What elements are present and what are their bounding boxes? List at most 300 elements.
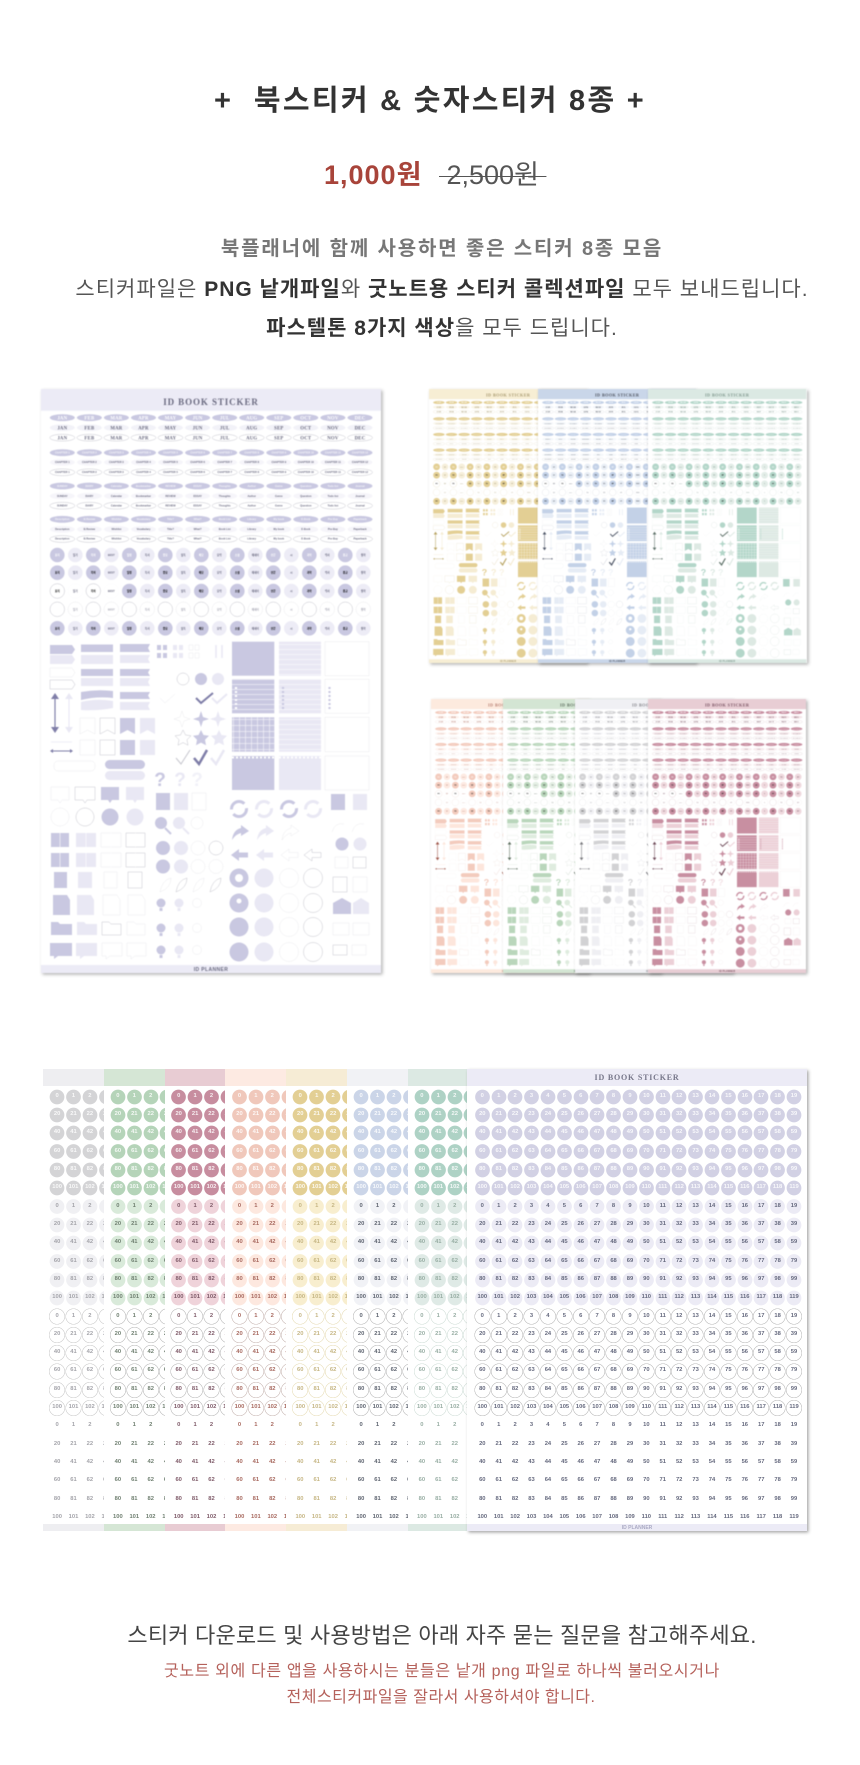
month stickers xyxy=(50,414,373,441)
number strip: green: 41 xyxy=(131,1129,138,1135)
number grids: 24 xyxy=(545,1331,551,1337)
number grids: 4 xyxy=(546,1312,550,1318)
number strip: blue: 61 xyxy=(374,1367,381,1373)
number strip: yellow: 20 xyxy=(297,1331,304,1337)
number grids: 44 xyxy=(545,1239,551,1245)
number strip: grey: 40 xyxy=(54,1459,60,1465)
number strip: blue: 80 xyxy=(358,1166,364,1172)
number grids: 28 xyxy=(610,1111,617,1117)
number strip: blue: 62 xyxy=(391,1148,397,1154)
number grids: 64 xyxy=(545,1477,551,1483)
number strip: yellow: 80 xyxy=(297,1276,304,1282)
number strip: mint: 21 xyxy=(435,1111,442,1117)
number strip: mint: 102 xyxy=(450,1404,460,1410)
number grids: 59 xyxy=(791,1239,797,1245)
number strip: green: 41 xyxy=(131,1349,138,1355)
number grids: 55 xyxy=(725,1129,732,1135)
number grids: 8 xyxy=(612,1422,615,1428)
number strip: mint: 0 xyxy=(420,1422,424,1428)
number strip: green: 20 xyxy=(115,1221,121,1227)
number strip: blue: 60 xyxy=(358,1477,364,1483)
number grids: 21 xyxy=(495,1111,502,1117)
number strip: peach: 40 xyxy=(236,1459,243,1465)
number grids: 100 xyxy=(477,1294,487,1300)
number strip: rose: 0 xyxy=(177,1093,180,1099)
number grids: 70 xyxy=(643,1258,650,1264)
number strip: green: 81 xyxy=(131,1276,138,1282)
number grids: 17 xyxy=(758,1093,764,1099)
number grids: 85 xyxy=(561,1496,568,1502)
month stickers: JUN xyxy=(193,416,203,421)
category stickers: B.Review xyxy=(84,517,96,521)
number strip: green: 81 xyxy=(131,1386,138,1392)
number grids: 54 xyxy=(709,1349,715,1355)
number grids: 33 xyxy=(692,1221,699,1227)
number grids: 23 xyxy=(528,1441,535,1447)
number strip: mint: 80 xyxy=(419,1276,425,1282)
number grids: 12 xyxy=(676,1422,682,1428)
number grids: 46 xyxy=(578,1129,584,1135)
number grids: 8 xyxy=(612,1312,615,1318)
number grids: 103 xyxy=(527,1514,536,1520)
number grids: 49 xyxy=(627,1239,633,1245)
number grids: 105 xyxy=(559,1184,569,1190)
chapter stickers: CHAPTER 3 xyxy=(109,451,124,455)
number grids: 31 xyxy=(660,1221,666,1227)
number strip: mint: 22 xyxy=(451,1221,458,1227)
number strip: green: 80 xyxy=(115,1166,121,1172)
number strip: grey: 2 xyxy=(88,1422,92,1428)
number grids: 92 xyxy=(676,1496,682,1502)
number strip: yellow: 2 xyxy=(331,1422,335,1428)
number strip: blue: 42 xyxy=(391,1239,397,1245)
number grids: 43 xyxy=(528,1239,535,1245)
number grids: 49 xyxy=(627,1459,633,1465)
number grids: 83 xyxy=(528,1496,535,1502)
number strip: mint: 40 xyxy=(419,1459,425,1465)
number grids: 85 xyxy=(561,1166,568,1172)
number strip: mint: 42 xyxy=(451,1459,458,1465)
number strip: rose: 1 xyxy=(193,1093,197,1099)
number strip: rose: 41 xyxy=(192,1239,198,1245)
number strip: yellow: 42 xyxy=(330,1459,336,1465)
number strip: peach: 82 xyxy=(269,1496,276,1502)
number strip: mint: 22 xyxy=(451,1111,458,1117)
number grids: 74 xyxy=(709,1148,715,1154)
number grids: 36 xyxy=(742,1441,748,1447)
number strip: blue: 20 xyxy=(358,1221,364,1227)
chapter stickers: CHAPTER 9 xyxy=(271,451,287,455)
number grids: 37 xyxy=(758,1111,764,1117)
number strip: peach: 40 xyxy=(236,1349,243,1355)
number grids: 91 xyxy=(660,1386,666,1392)
number grids: 30 xyxy=(643,1331,650,1337)
number strip: mint: 80 xyxy=(419,1166,425,1172)
sheet contents: ID BOOK STICKER xyxy=(163,397,259,407)
number grids: 51 xyxy=(660,1349,666,1355)
number strip: green: 0 xyxy=(116,1422,120,1428)
number strip: grey: 81 xyxy=(70,1496,77,1502)
number grids: 95 xyxy=(725,1386,732,1392)
chapter stickers: CHAPTER 2 xyxy=(82,451,97,455)
number strip: rose: 60 xyxy=(175,1367,182,1373)
number strip: blue: 42 xyxy=(391,1129,397,1135)
number grids: 26 xyxy=(578,1111,584,1117)
number strip: grey: 101 xyxy=(69,1514,78,1520)
number strip: blue: 102 xyxy=(389,1514,399,1520)
number grids: 68 xyxy=(610,1258,617,1264)
number grids: 98 xyxy=(774,1386,781,1392)
number strip: grey: 80 xyxy=(54,1386,60,1392)
number strip: mint: 41 xyxy=(435,1129,442,1135)
number strip: blue: 0 xyxy=(359,1093,363,1099)
chapter stickers: CHAPTER 5 xyxy=(163,451,178,455)
number strip: grey: 1 xyxy=(72,1093,75,1099)
number strip: mint: 62 xyxy=(451,1367,458,1373)
number strip: mint: 62 xyxy=(451,1148,458,1154)
number grids: 95 xyxy=(725,1496,732,1502)
number grids: 14 xyxy=(709,1422,715,1428)
number grids: 42 xyxy=(512,1349,518,1355)
number strip: green: 61 xyxy=(131,1148,138,1154)
number strip: rose: 41 xyxy=(192,1129,198,1135)
number grids: 74 xyxy=(709,1477,715,1483)
number strip: yellow: 22 xyxy=(330,1111,336,1117)
panel: grey sheet xyxy=(575,699,733,973)
number strip: peach: 101 xyxy=(251,1404,261,1410)
round label stickers: 독서 xyxy=(145,553,150,557)
number grids: 6 xyxy=(579,1422,582,1428)
number grids: 41 xyxy=(495,1129,502,1135)
number grids: 52 xyxy=(676,1239,682,1245)
number strip: green: 82 xyxy=(147,1276,154,1282)
number strip: rose: 42 xyxy=(208,1129,215,1135)
number grids: 5 xyxy=(563,1312,566,1318)
number grids: 92 xyxy=(676,1276,682,1282)
category stickers: Genre xyxy=(275,484,283,488)
number strip: peach: 22 xyxy=(269,1331,276,1337)
number grids: 86 xyxy=(578,1386,584,1392)
number strip: green: 20 xyxy=(115,1331,121,1337)
round label stickers: 일기 xyxy=(73,553,78,557)
round label stickers: 표지 xyxy=(55,553,60,557)
number strip: green: 101 xyxy=(129,1514,139,1520)
number grids: 9 xyxy=(628,1312,632,1318)
month stickers: OCT xyxy=(300,416,312,421)
category stickers: Library xyxy=(247,517,257,521)
number grids: 78 xyxy=(774,1148,781,1154)
number grids: 0 xyxy=(481,1312,484,1318)
number grids: 55 xyxy=(725,1239,732,1245)
number grids: 83 xyxy=(528,1386,535,1392)
number grids: 83 xyxy=(528,1276,535,1282)
number strip: grey: 81 xyxy=(70,1276,77,1282)
number strip: rose: 42 xyxy=(208,1459,215,1465)
number grids: 119 xyxy=(789,1404,799,1410)
number grids: 18 xyxy=(774,1203,781,1209)
number strip: peach: 0 xyxy=(238,1422,241,1428)
number strip: blue: 21 xyxy=(374,1441,381,1447)
number grids: 4 xyxy=(546,1203,550,1209)
number strip: yellow: 0 xyxy=(299,1312,302,1318)
number grids: 82 xyxy=(512,1386,518,1392)
number strip: rose: 40 xyxy=(175,1129,182,1135)
number strip: blue: 60 xyxy=(358,1258,364,1264)
number grids: 100 xyxy=(477,1514,487,1520)
number strip: mint: 102 xyxy=(450,1184,460,1190)
number grids: 80 xyxy=(479,1386,486,1392)
category stickers: Thoughts xyxy=(219,484,231,488)
number strip: yellow: 22 xyxy=(330,1221,336,1227)
number grids: 3 xyxy=(530,1312,533,1318)
number strip: blue: 101 xyxy=(373,1404,382,1410)
number strip: green: 1 xyxy=(133,1422,136,1428)
number strip: green: 100 xyxy=(113,1514,123,1520)
number strip: grey: 21 xyxy=(70,1221,77,1227)
number strip: peach: 0 xyxy=(238,1312,241,1318)
number grids: 96 xyxy=(742,1386,748,1392)
number strip: blue: 40 xyxy=(358,1239,364,1245)
number grids: 32 xyxy=(676,1221,682,1227)
number strip: green: 61 xyxy=(131,1258,138,1264)
number strip: peach: 21 xyxy=(253,1441,259,1447)
number strip: peach: 1 xyxy=(254,1093,258,1099)
number strip: rose: 81 xyxy=(192,1276,198,1282)
number strip: mint: 101 xyxy=(433,1514,443,1520)
number grids: 116 xyxy=(740,1294,749,1300)
number strip: rose: 2 xyxy=(210,1203,213,1209)
number strip: yellow: 101 xyxy=(312,1294,322,1300)
number grids: 70 xyxy=(643,1367,650,1373)
number strip: blue: 2 xyxy=(392,1312,396,1318)
number grids: 117 xyxy=(757,1514,766,1520)
number grids: 45 xyxy=(561,1239,568,1245)
number strip: blue: 22 xyxy=(391,1441,397,1447)
number grids: 41 xyxy=(495,1349,502,1355)
number grids: 19 xyxy=(791,1203,797,1209)
number strip: blue: 21 xyxy=(374,1111,381,1117)
number strip: grey: 22 xyxy=(87,1111,93,1117)
number strip: green: 60 xyxy=(115,1477,121,1483)
number strip: mint: 0 xyxy=(420,1093,424,1099)
number strip: yellow: 0 xyxy=(299,1203,302,1209)
number strip: yellow: 2 xyxy=(331,1312,335,1318)
number grids: 64 xyxy=(545,1148,551,1154)
number strip: blue: 42 xyxy=(391,1349,397,1355)
number grids: 33 xyxy=(692,1441,699,1447)
number strip: mint: 102 xyxy=(450,1294,460,1300)
number strip: grey: 62 xyxy=(87,1258,93,1264)
number grids: 59 xyxy=(791,1459,797,1465)
number strip: yellow: 2 xyxy=(331,1093,335,1099)
number strip: grey: 60 xyxy=(54,1477,60,1483)
number grids: 90 xyxy=(643,1386,650,1392)
round label stickers: 소설 xyxy=(235,553,240,557)
number strip: green: 2 xyxy=(149,1312,152,1318)
number strip: green: 21 xyxy=(131,1441,138,1447)
number grids: 4 xyxy=(546,1422,550,1428)
number grids: 0 xyxy=(481,1093,484,1099)
category stickers: Title? xyxy=(167,517,174,521)
category stickers: Calendar xyxy=(111,484,122,488)
number strip: blue: 102 xyxy=(389,1184,399,1190)
number strip: mint: 2 xyxy=(453,1093,456,1099)
number strip: rose: 21 xyxy=(192,1331,198,1337)
number strip: mint: 22 xyxy=(451,1331,458,1337)
number grids: 55 xyxy=(725,1349,732,1355)
number grids: 82 xyxy=(512,1276,518,1282)
number strip: peach: 40 xyxy=(236,1129,243,1135)
number strip: rose: 101 xyxy=(190,1184,200,1190)
number strip: green: 61 xyxy=(131,1367,138,1373)
number grids: 35 xyxy=(725,1331,732,1337)
number strip: peach: 42 xyxy=(269,1129,276,1135)
number strip: blue: 41 xyxy=(374,1239,381,1245)
number strip: mint: 80 xyxy=(419,1386,425,1392)
number strip: rose: 60 xyxy=(175,1148,182,1154)
number grids: 21 xyxy=(495,1221,502,1227)
number strip: grey: 41 xyxy=(70,1459,77,1465)
number strip: green: 62 xyxy=(147,1477,154,1483)
number grids: 117 xyxy=(757,1184,766,1190)
number grids: 3 xyxy=(530,1203,533,1209)
number strip: yellow: 41 xyxy=(313,1349,320,1355)
number grids: 3 xyxy=(530,1093,533,1099)
number grids: 45 xyxy=(561,1349,568,1355)
number strip: mint: 82 xyxy=(451,1496,458,1502)
number grids: 115 xyxy=(724,1294,733,1300)
number grids: 26 xyxy=(578,1441,584,1447)
number grids: 1 xyxy=(497,1422,500,1428)
number strip: blue: 101 xyxy=(373,1294,382,1300)
number grids: 13 xyxy=(692,1312,699,1318)
number grids: 89 xyxy=(627,1496,633,1502)
number grids: 76 xyxy=(742,1367,748,1373)
number strip: peach: 82 xyxy=(269,1166,276,1172)
number grids: 79 xyxy=(791,1148,797,1154)
number grids: 10 xyxy=(643,1422,650,1428)
number grids: 9 xyxy=(628,1203,632,1209)
number grids: 46 xyxy=(578,1459,584,1465)
number strip: grey: 80 xyxy=(54,1496,60,1502)
number strip: rose: 40 xyxy=(175,1459,182,1465)
number grids: 42 xyxy=(512,1129,518,1135)
number grids: 96 xyxy=(742,1166,748,1172)
number grids: 28 xyxy=(610,1331,617,1337)
number strip: yellow: 62 xyxy=(330,1477,336,1483)
number strip: yellow: 61 xyxy=(313,1148,320,1154)
number strip: rose: 80 xyxy=(175,1276,182,1282)
number grids: 108 xyxy=(609,1184,618,1190)
number strip: yellow: 1 xyxy=(315,1312,318,1318)
number strip: mint: 82 xyxy=(451,1166,458,1172)
chapter stickers: CHAPTER 11 xyxy=(325,451,341,455)
number strip: yellow: 60 xyxy=(297,1477,304,1483)
number grids: 87 xyxy=(594,1386,600,1392)
number strip: yellow: 101 xyxy=(312,1184,322,1190)
panel: lavender number sheet xyxy=(467,1069,807,1531)
number grids: 42 xyxy=(512,1459,518,1465)
number grids: 71 xyxy=(660,1148,666,1154)
number grids: 70 xyxy=(643,1148,650,1154)
number grids: 109 xyxy=(625,1294,635,1300)
number grids: 5 xyxy=(563,1203,566,1209)
number strip: rose: 61 xyxy=(192,1477,198,1483)
number grids: 38 xyxy=(774,1111,781,1117)
number strip: peach: 60 xyxy=(236,1367,243,1373)
number strip: blue: 81 xyxy=(374,1276,381,1282)
number strip: green: 41 xyxy=(131,1239,138,1245)
number grids: 108 xyxy=(609,1514,618,1520)
number grids: 11 xyxy=(660,1312,666,1318)
chapter stickers: CHAPTER 8 xyxy=(244,451,260,455)
number grids: 69 xyxy=(627,1148,633,1154)
number strip: blue: 82 xyxy=(391,1496,397,1502)
number grids: 15 xyxy=(725,1312,732,1318)
number strip: blue: 80 xyxy=(358,1496,364,1502)
number grids: 74 xyxy=(709,1367,715,1373)
number grids: 56 xyxy=(742,1349,748,1355)
number grids: 102 xyxy=(510,1294,520,1300)
number grids: 22 xyxy=(512,1221,518,1227)
number grids: 25 xyxy=(561,1441,568,1447)
month stickers: APR xyxy=(138,416,149,421)
number grids: 93 xyxy=(692,1386,699,1392)
number strip: peach: 2 xyxy=(271,1203,274,1209)
number grids: 39 xyxy=(791,1331,797,1337)
number strip: yellow: 61 xyxy=(313,1477,320,1483)
number strip: rose: 81 xyxy=(192,1496,198,1502)
number strip: peach: 0 xyxy=(238,1203,241,1209)
number strip: green: 82 xyxy=(147,1386,154,1392)
number strip: grey: 1 xyxy=(72,1312,75,1318)
number grids: 108 xyxy=(609,1294,618,1300)
number strip: blue: 41 xyxy=(374,1129,381,1135)
number grids: 110 xyxy=(642,1294,651,1300)
number grids: 10 xyxy=(643,1312,650,1318)
number grids: 105 xyxy=(559,1404,569,1410)
number strip: green: 102 xyxy=(146,1184,156,1190)
number grids: 15 xyxy=(725,1422,732,1428)
number grids: 109 xyxy=(625,1404,635,1410)
number strip: grey: 20 xyxy=(54,1111,60,1117)
number grids: 91 xyxy=(660,1166,666,1172)
number strip: mint: 40 xyxy=(419,1349,425,1355)
number grids: 96 xyxy=(742,1276,748,1282)
number grids: 36 xyxy=(742,1221,748,1227)
number grids: 107 xyxy=(592,1294,602,1300)
number grids: 51 xyxy=(660,1239,666,1245)
number grids: 32 xyxy=(676,1331,682,1337)
number grids: 50 xyxy=(643,1129,650,1135)
number strip: grey: 101 xyxy=(69,1404,78,1410)
number grids: 33 xyxy=(692,1111,699,1117)
number grids: 59 xyxy=(791,1349,797,1355)
number grids: 22 xyxy=(512,1331,518,1337)
number grids: 37 xyxy=(758,1221,764,1227)
number strip: yellow: 42 xyxy=(330,1129,336,1135)
number grids: 0 xyxy=(481,1203,484,1209)
number strip: grey: 41 xyxy=(70,1129,77,1135)
number grids: 96 xyxy=(742,1496,748,1502)
number strip: blue: 0 xyxy=(359,1203,363,1209)
number strip: mint: 62 xyxy=(451,1258,458,1264)
number strip: mint: 1 xyxy=(437,1422,440,1428)
number grids: 56 xyxy=(742,1129,748,1135)
subheading: 북플래너에 함께 사용하면 좋은 스티커 8종 모음 xyxy=(221,238,663,260)
number strip: yellow: 62 xyxy=(330,1148,336,1154)
number strip: green: 42 xyxy=(147,1459,154,1465)
